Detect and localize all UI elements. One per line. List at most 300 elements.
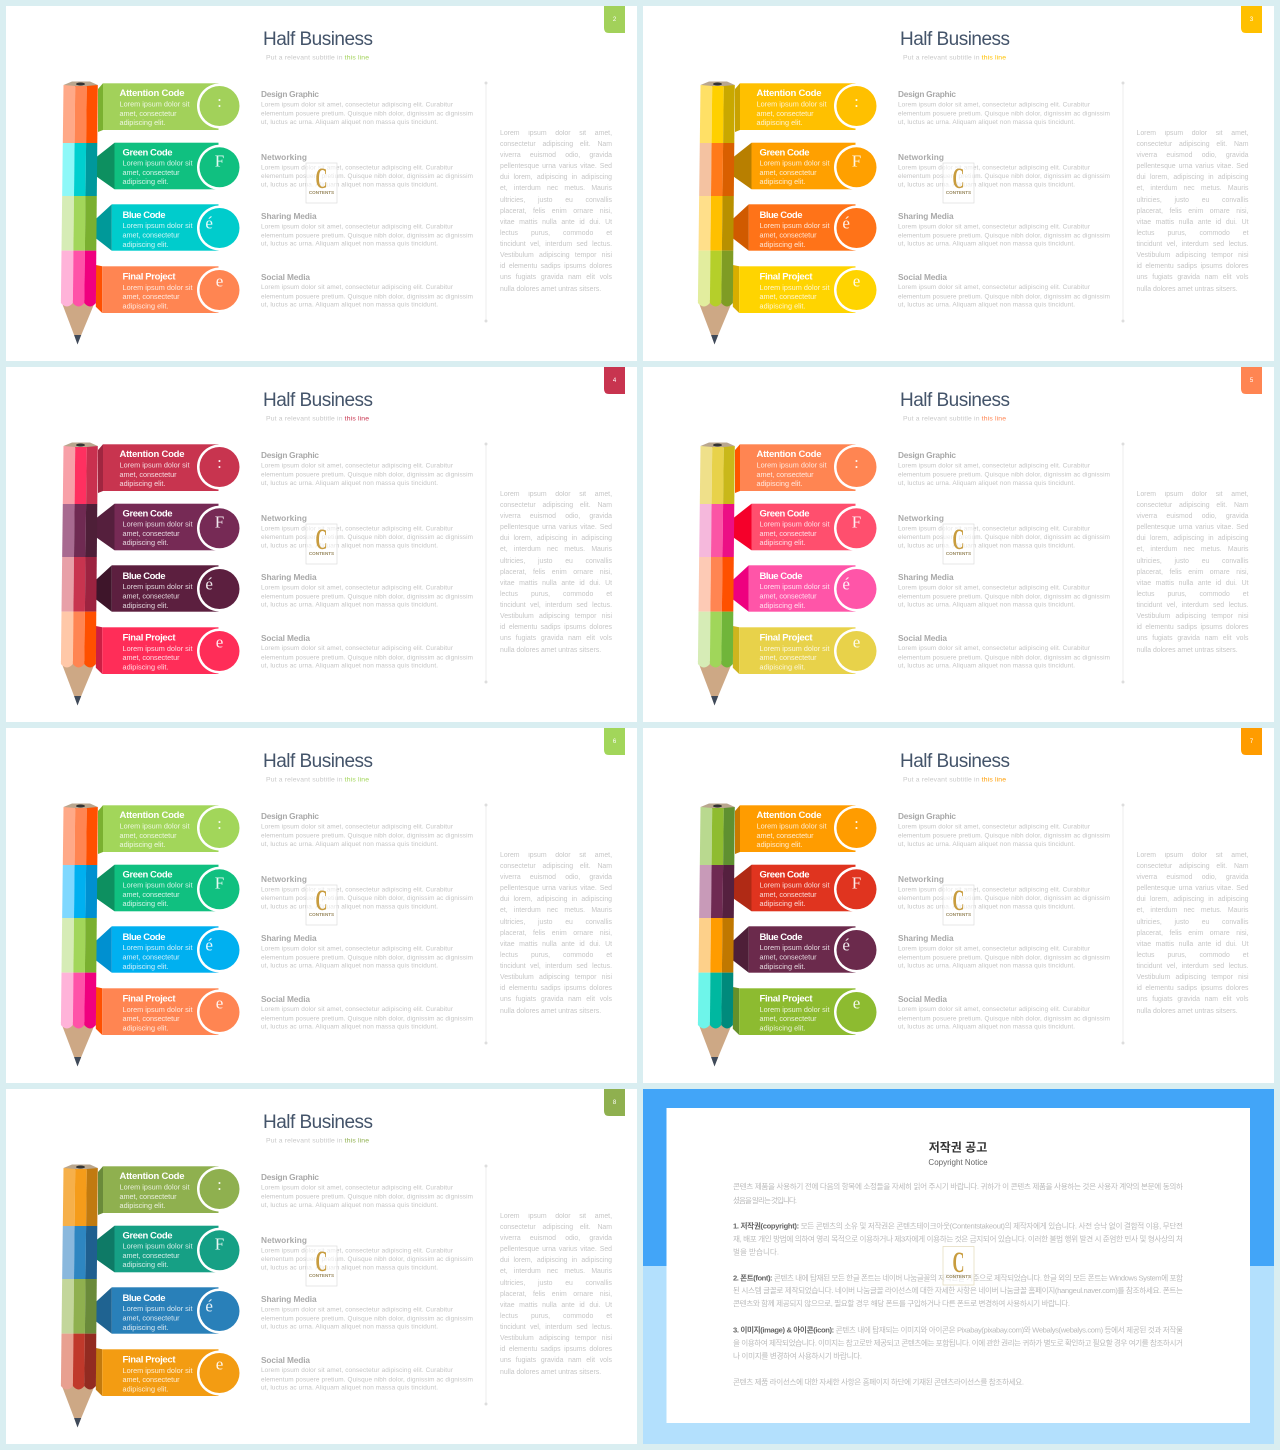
section: social media — [898, 272, 1110, 308]
banner: attention code: Lorem ipsum dolor sit — [120, 822, 190, 830]
watermark — [942, 523, 974, 564]
notice card — [666, 1108, 1250, 1423]
text column: dui lorem, adipiscing in adipiscing — [500, 174, 612, 181]
text column: ultricies, justo eu convallis — [1136, 197, 1248, 204]
text column: et, interdum nec metus. Mauris — [500, 907, 612, 914]
banner: final project: adipiscing elit. — [122, 662, 168, 672]
text column: id elementu sadips ipsums dolores — [500, 263, 612, 270]
section: social media — [261, 272, 473, 308]
text column: Lorem ipsum dolor sit amet, — [500, 491, 612, 498]
notice subheading: Copyright Notice — [928, 1158, 988, 1167]
section: social media: ut, luctus ac urna. Aliquam aliquet non massa quis tincidunt. — [261, 302, 438, 308]
banner: blue code: amet, consectetur — [122, 952, 180, 962]
banner: attention code: amet, consectetur — [120, 109, 177, 118]
text column: nulla dolores amet untras sitsers. — [500, 647, 601, 654]
text column: vitae mattis nulla ante id dui. Ut — [1136, 941, 1248, 948]
banner: blue code: amet, consectetur — [759, 952, 817, 962]
section: networking: ut, luctus ac urna. Aliquam aliquet non massa quis tincidunt. — [261, 1264, 438, 1272]
section: networking: Lorem ipsum dolor sit amet, consectetur adipiscing elit. Curabitur — [898, 164, 1090, 172]
banner: final project: e — [216, 994, 223, 1013]
text column: Lorem ipsum dolor sit amet, — [1136, 491, 1248, 498]
section: social media: Lorem ipsum dolor sit amet, consectetur adipiscing elit. Curabitur — [898, 1006, 1090, 1013]
banner: blue code: Blue Code — [122, 571, 166, 582]
banner: attention code: adipiscing elit. — [120, 840, 166, 849]
page tag — [604, 1089, 625, 1116]
section: social media: elementum posuere pretium. Quisque nibh dolor, dignissim ac dignissim — [898, 294, 1110, 300]
banner: attention code: adipiscing elit. — [756, 840, 802, 849]
section: networking: Networking — [261, 874, 307, 884]
section: social media: Social Media — [898, 994, 947, 1004]
banner: blue code: Blue Code — [759, 210, 802, 221]
watermark: CONTENTS — [309, 912, 334, 917]
banner: attention code: : — [854, 453, 858, 472]
text column: dui lorem, adipiscing in adipiscing — [500, 896, 612, 903]
page tag — [1240, 367, 1262, 394]
banner: blue code: amet, consectetur — [759, 230, 817, 240]
text column: Vestibulum adipiscing tempor nisi — [1136, 974, 1248, 981]
text column — [500, 852, 612, 1015]
icon: pencil — [697, 82, 734, 344]
banner: green code: amet, consectetur — [122, 168, 180, 177]
watermark — [306, 523, 337, 564]
section: sharing media: Lorem ipsum dolor sit amet, consectetur adipiscing elit. Curabitur — [898, 224, 1090, 230]
section: social media: Lorem ipsum dolor sit amet, consectetur adipiscing elit. Curabitur — [898, 284, 1090, 291]
section: social media: elementum posuere pretium. Quisque nibh dolor, dignissim ac dignissim — [261, 294, 473, 300]
banner: blue code: é — [842, 213, 849, 232]
text column: nulla dolores amet untras sitsers. — [1136, 647, 1238, 654]
watermark — [306, 1245, 337, 1286]
text column: et, interdum nec metus. Mauris — [1136, 907, 1248, 914]
banner: attention code: Attention Code — [120, 449, 184, 460]
section: networking: elementum posuere pretium. Quisque nibh dolor, dignissim ac dignissim — [261, 534, 473, 541]
banner: green code — [733, 143, 878, 190]
text column: consectetur adipiscing elit. Nam — [500, 502, 612, 509]
text column: vitae mattis nulla ante id dui. Ut — [500, 1302, 612, 1309]
banner: blue code: amet, consectetur — [122, 592, 180, 600]
section: design graphic: ut, luctus ac urna. Aliquam aliquet non massa quis tincidunt. — [261, 1202, 438, 1209]
text column: id elementu sadips ipsums dolores — [1136, 985, 1248, 992]
section: sharing media: elementum posuere pretium. Quisque nibh dolor, dignissim ac dignissim — [261, 1316, 473, 1322]
banner: final project: adipiscing elit. — [122, 302, 168, 310]
banner: attention code: : — [217, 814, 222, 833]
watermark: C — [316, 884, 327, 917]
banner: final project: adipiscing elit. — [759, 662, 805, 672]
banner: green code: amet, consectetur — [759, 168, 817, 177]
watermark: C — [316, 523, 327, 556]
section: networking: Lorem ipsum dolor sit amet, consectetur adipiscing elit. Curabitur — [898, 526, 1090, 532]
text column: Vestibulum adipiscing tempor nisi — [500, 252, 612, 259]
title: Half Business — [900, 751, 1010, 772]
title: Half Business — [900, 29, 1010, 50]
text column: et, interdum nec metus. Mauris — [500, 546, 612, 553]
banner: green code: Green Code — [759, 870, 809, 880]
banner: blue code: Lorem ipsum dolor sit — [122, 221, 192, 230]
banner: blue code: amet, consectetur — [122, 230, 180, 240]
section: social media: ut, luctus ac urna. Aliquam aliquet non massa quis tincidunt. — [898, 1024, 1075, 1030]
watermark: C — [952, 162, 964, 195]
text column: tincidunt vel, interdum sed lectus. — [500, 1324, 612, 1331]
banner: green code: adipiscing elit. — [759, 177, 805, 186]
banner: attention code: Lorem ipsum dolor sit — [756, 822, 826, 830]
text column: pellentesque urna varius vitae. Sed — [500, 1246, 612, 1253]
text column: id elementu sadips ipsums dolores — [500, 1346, 612, 1353]
text column: nulla dolores amet untras sitsers. — [1136, 286, 1238, 293]
section: networking: Lorem ipsum dolor sit amet, consectetur adipiscing elit. Curabitur — [261, 164, 454, 172]
text column: ultricies, justo eu convallis — [500, 197, 612, 204]
text column: et, interdum nec metus. Mauris — [500, 185, 612, 192]
banner: green code: Lorem ipsum dolor sit — [759, 520, 829, 528]
watermark — [306, 884, 337, 925]
section: sharing media: Sharing Media — [898, 572, 953, 582]
section: networking: elementum posuere pretium. Quisque nibh dolor, dignissim ac dignissim — [261, 1256, 473, 1263]
banner: attention code: Lorem ipsum dolor sit — [120, 100, 190, 108]
page tag: 6 — [613, 739, 617, 745]
banner: green code: F — [851, 513, 861, 532]
banner: final project: amet, consectetur — [759, 292, 817, 301]
text column: placerat, felis enim ornare nisi, — [500, 930, 612, 937]
text column: tincidunt vel, interdum sed lectus. — [500, 241, 612, 248]
text column: lectus purus, commodo et — [500, 230, 612, 237]
section: design graphic — [898, 89, 1110, 126]
section: sharing media: ut, luctus ac urna. Aliquam aliquet non massa quis tincidunt. — [898, 602, 1075, 608]
clause 3: image and icon — [733, 1325, 1183, 1361]
text column: lectus purus, commodo et — [1136, 591, 1248, 598]
section: social media: Social Media — [261, 994, 310, 1004]
banner: blue code: Blue Code — [122, 932, 166, 943]
banner: blue code: amet, consectetur — [759, 592, 817, 600]
text column: vitae mattis nulla ante id dui. Ut — [500, 941, 612, 948]
clause 2: font: 2. 폰트(font): 콘텐츠 내에 탑재된 모든 한글 폰트는 네이버 나눔글꼴의 저작권을 기준으로 제작되었습니다. 한글 외의 모든 폰트는 Windows System에 포함 — [733, 1273, 1183, 1283]
section: design graphic: elementum posuere pretium. Quisque nibh dolor, dignissim ac dignissim — [261, 472, 473, 478]
text column: placerat, felis enim ornare nisi, — [1136, 208, 1248, 215]
section: sharing media: ut, luctus ac urna. Aliquam aliquet non massa quis tincidunt. — [261, 962, 438, 970]
banner: green code — [733, 865, 878, 912]
text column: id elementu sadips ipsums dolores — [1136, 263, 1248, 270]
section: social media: ut, luctus ac urna. Aliquam aliquet non massa quis tincidunt. — [898, 302, 1075, 308]
banner: green code: Green Code — [122, 508, 172, 520]
banner: blue code: é — [205, 1296, 213, 1315]
banner: attention code — [98, 805, 242, 854]
banner: green code: adipiscing elit. — [122, 177, 168, 186]
banner: blue code: Lorem ipsum dolor sit — [122, 1304, 192, 1313]
section: social media: Social Media — [261, 633, 310, 643]
section: networking: elementum posuere pretium. Quisque nibh dolor, dignissim ac dignissim — [261, 895, 473, 902]
banner: final project — [96, 265, 242, 313]
banner: green code: adipiscing elit. — [122, 1260, 168, 1269]
banner: attention code: adipiscing elit. — [120, 118, 166, 127]
text column: et, interdum nec metus. Mauris — [500, 1268, 612, 1275]
banner: green code: F — [215, 513, 224, 532]
panel: slide 6 — [6, 728, 637, 1083]
section: design graphic: Design Graphic — [261, 89, 319, 99]
banner: blue code — [732, 926, 878, 973]
banner: final project: amet, consectetur — [759, 653, 817, 662]
text column: vitae mattis nulla ante id dui. Ut — [1136, 580, 1248, 587]
banner: attention code: amet, consectetur — [120, 1192, 177, 1201]
text column: id elementu sadips ipsums dolores — [1136, 624, 1248, 631]
section: social media: Social Media — [261, 1355, 310, 1365]
text column: tincidunt vel, interdum sed lectus. — [1136, 963, 1248, 970]
section: design graphic: ut, luctus ac urna. Aliquam aliquet non massa quis tincidunt. — [261, 841, 438, 848]
banner: green code: amet, consectetur — [122, 529, 180, 538]
banner: final project: adipiscing elit. — [122, 1024, 168, 1032]
banner: final project — [96, 1348, 242, 1396]
text column: placerat, felis enim ornare nisi, — [500, 569, 612, 576]
text column: id elementu sadips ipsums dolores — [500, 624, 612, 631]
text column: dui lorem, adipiscing in adipiscing — [1136, 174, 1248, 181]
section: networking: elementum posuere pretium. Quisque nibh dolor, dignissim ac dignissim — [898, 173, 1110, 180]
banner: attention code: amet, consectetur — [120, 831, 177, 840]
panel: slide 5 — [643, 367, 1274, 722]
banner: green code: Green Code — [759, 508, 809, 520]
text column: dui lorem, adipiscing in adipiscing — [500, 535, 612, 542]
watermark: CONTENTS — [945, 551, 971, 556]
section: networking: Networking — [898, 874, 944, 884]
section: networking: elementum posuere pretium. Quisque nibh dolor, dignissim ac dignissim — [261, 173, 473, 180]
banner: attention code: : — [217, 92, 222, 111]
banner: green code: Green Code — [122, 1230, 172, 1242]
icon: pencil — [61, 1164, 98, 1428]
banner: green code: F — [215, 1235, 224, 1254]
section: social media: Lorem ipsum dolor sit amet, consectetur adipiscing elit. Curabitur — [261, 1367, 454, 1374]
text column — [1136, 130, 1248, 293]
text column — [500, 491, 612, 654]
section: social media: ut, luctus ac urna. Aliquam aliquet non massa quis tincidunt. — [261, 1384, 438, 1392]
section: social media: Lorem ipsum dolor sit amet, consectetur adipiscing elit. Curabitur — [261, 645, 454, 652]
section: networking: ut, luctus ac urna. Aliquam aliquet non massa quis tincidunt. — [898, 904, 1075, 910]
banner: attention code: adipiscing elit. — [756, 479, 802, 488]
banner: final project: Final Project — [759, 632, 813, 644]
page tag — [604, 728, 625, 755]
banner: final project: adipiscing elit. — [759, 1024, 805, 1032]
icon: pencil — [697, 442, 734, 706]
banner: final project — [96, 626, 242, 674]
subtitle: Put a relevant subtitle in this line — [902, 54, 1006, 62]
text column: Lorem ipsum dolor sit amet, — [500, 852, 612, 859]
text column: lectus purus, commodo et — [500, 952, 612, 959]
watermark — [942, 162, 974, 203]
title: Half Business — [263, 390, 373, 411]
text column: vitae mattis nulla ante id dui. Ut — [500, 580, 612, 587]
text column: vitae mattis nulla ante id dui. Ut — [1136, 219, 1248, 226]
text column: uns fugiats gravida nam elit vols — [1136, 274, 1248, 281]
subtitle: Put a relevant subtitle in this line — [266, 776, 369, 784]
section: design graphic: elementum posuere pretium. Quisque nibh dolor, dignissim ac dignissim — [261, 110, 473, 118]
section: design graphic: ut, luctus ac urna. Aliquam aliquet non massa quis tincidunt. — [261, 480, 438, 487]
watermark: C — [316, 162, 327, 195]
section: design graphic: Design Graphic — [898, 89, 956, 99]
clause 3: image and icon: 나 이미지를 변경하여 사용하시기 바랍니다. — [733, 1351, 862, 1361]
section: design graphic: Lorem ipsum dolor sit amet, consectetur adipiscing elit. Curabitur — [261, 462, 454, 470]
section: networking — [261, 874, 473, 910]
banner: blue code: adipiscing elit. — [122, 962, 168, 971]
banner: final project — [732, 987, 878, 1035]
text column: Lorem ipsum dolor sit amet, — [1136, 852, 1248, 859]
section: sharing media — [898, 933, 1110, 970]
banner: blue code — [96, 926, 242, 973]
watermark: C — [316, 1245, 327, 1278]
intro paragraph — [733, 1181, 1183, 1205]
banner: green code — [97, 504, 242, 551]
banner: blue code: adipiscing elit. — [122, 240, 168, 249]
banner: final project: e — [216, 272, 223, 291]
banner: green code: Lorem ipsum dolor sit — [759, 158, 829, 168]
banner: attention code: Attention Code — [120, 88, 184, 99]
banner: attention code: adipiscing elit. — [756, 118, 802, 127]
intro paragraph: 콘텐츠 제품을 사용하기 전에 다음의 항목에 소정들을 자세히 읽어 주시기 바랍니다. 귀하가 이 콘텐츠 제품을 사용하는 것은 사용자 계약의 본문에 동의하 — [733, 1181, 1183, 1191]
section: sharing media: Sharing Media — [261, 211, 317, 221]
text column: pellentesque urna varius vitae. Sed — [500, 524, 612, 531]
section: networking — [261, 513, 473, 550]
banner: blue code: é — [205, 935, 213, 954]
banner: attention code: Attention Code — [120, 810, 184, 821]
text column — [500, 1213, 612, 1376]
page tag: 5 — [1249, 378, 1253, 384]
section: sharing media: elementum posuere pretium. Quisque nibh dolor, dignissim ac dignissim — [898, 954, 1110, 962]
watermark — [942, 884, 974, 925]
text column: viverra euismod odio, gravida — [1136, 513, 1248, 520]
title: Half Business — [263, 1112, 373, 1133]
text column: tincidunt vel, interdum sed lectus. — [500, 963, 612, 970]
section: networking — [898, 513, 1110, 550]
banner: green code: F — [851, 152, 861, 171]
text column: uns fugiats gravida nam elit vols — [500, 996, 612, 1003]
page tag — [604, 367, 625, 394]
section: design graphic: elementum posuere pretium. Quisque nibh dolor, dignissim ac dignissim — [898, 110, 1110, 118]
banner: green code: amet, consectetur — [759, 890, 817, 899]
banner: final project: Lorem ipsum dolor sit — [759, 283, 829, 292]
text column: dui lorem, adipiscing in adipiscing — [500, 1257, 612, 1264]
section: design graphic: Lorem ipsum dolor sit amet, consectetur adipiscing elit. Curabitur — [898, 102, 1090, 108]
banner: attention code: adipiscing elit. — [120, 1201, 166, 1210]
section: sharing media: Lorem ipsum dolor sit amet, consectetur adipiscing elit. Curabitur — [898, 584, 1090, 592]
section: networking — [261, 1235, 473, 1272]
text column: tincidunt vel, interdum sed lectus. — [500, 602, 612, 609]
section: sharing media: Lorem ipsum dolor sit amet, consectetur adipiscing elit. Curabitur — [261, 1306, 454, 1314]
watermark: CONTENTS — [309, 1273, 334, 1278]
banner: blue code: Lorem ipsum dolor sit — [759, 221, 829, 230]
banner: final project: e — [852, 633, 860, 652]
section: social media: Lorem ipsum dolor sit amet, consectetur adipiscing elit. Curabitur — [261, 284, 454, 291]
section: networking: Lorem ipsum dolor sit amet, consectetur adipiscing elit. Curabitur — [261, 526, 454, 532]
banner: blue code: Blue Code — [122, 210, 166, 221]
section: design graphic: ut, luctus ac urna. Aliquam aliquet non massa quis tincidunt. — [261, 119, 438, 126]
text column: et, interdum nec metus. Mauris — [1136, 546, 1248, 553]
section: sharing media — [261, 572, 473, 608]
clause 3: image and icon: 을 이용하여 제작되었습니다. 이미지는 참고로만 제공되고 콘텐츠에는 포함됩니다. 이에 관한 권리는 귀하가 별도로 확인하고 필요할 경우 여기를 참조하시거 — [733, 1338, 1183, 1348]
icon: pencil — [697, 804, 734, 1066]
text column: dui lorem, adipiscing in adipiscing — [1136, 896, 1248, 903]
text column: consectetur adipiscing elit. Nam — [500, 1224, 612, 1231]
banner: blue code: adipiscing elit. — [759, 962, 805, 971]
section: design graphic: ut, luctus ac urna. Aliquam aliquet non massa quis tincidunt. — [898, 841, 1075, 848]
text column: viverra euismod odio, gravida — [500, 874, 612, 881]
text column: ultricies, justo eu convallis — [1136, 558, 1248, 565]
banner: green code: Green Code — [122, 870, 172, 880]
section: design graphic: elementum posuere pretium. Quisque nibh dolor, dignissim ac dignissim — [898, 832, 1110, 840]
banner: attention code — [734, 83, 878, 132]
section: networking: ut, luctus ac urna. Aliquam aliquet non massa quis tincidunt. — [261, 182, 438, 188]
banner: green code: amet, consectetur — [122, 1251, 180, 1260]
banner: blue code: adipiscing elit. — [122, 1323, 168, 1332]
banner: final project: amet, consectetur — [122, 292, 180, 301]
banner: final project: amet, consectetur — [759, 1014, 817, 1023]
background: light blue band — [643, 1266, 1274, 1444]
section: sharing media: Sharing Media — [898, 933, 953, 943]
banner: green code: Lorem ipsum dolor sit — [122, 520, 192, 528]
section: sharing media: Lorem ipsum dolor sit amet, consectetur adipiscing elit. Curabitur — [261, 584, 454, 592]
text column: ultricies, justo eu convallis — [500, 919, 612, 926]
title: Half Business — [900, 390, 1010, 411]
banner: final project: Final Project — [759, 272, 813, 282]
text column: dui lorem, adipiscing in adipiscing — [1136, 535, 1248, 542]
section: sharing media: ut, luctus ac urna. Aliquam aliquet non massa quis tincidunt. — [898, 962, 1075, 970]
section: design graphic: Lorem ipsum dolor sit amet, consectetur adipiscing elit. Curabitur — [261, 1184, 454, 1192]
banner: green code: Lorem ipsum dolor sit — [759, 880, 829, 890]
section: sharing media — [898, 211, 1110, 248]
page tag — [604, 6, 625, 33]
text column: lectus purus, commodo et — [500, 1313, 612, 1320]
section: design graphic — [261, 450, 473, 487]
page tag — [1240, 6, 1262, 33]
section: design graphic: elementum posuere pretium. Quisque nibh dolor, dignissim ac dignissim — [261, 832, 473, 840]
section: design graphic: Lorem ipsum dolor sit amet, consectetur adipiscing elit. Curabitur — [898, 824, 1090, 830]
text column: pellentesque urna varius vitae. Sed — [1136, 524, 1248, 531]
section: networking: ut, luctus ac urna. Aliquam aliquet non massa quis tincidunt. — [261, 542, 438, 550]
section: design graphic: Lorem ipsum dolor sit amet, consectetur adipiscing elit. Curabitur — [261, 824, 454, 830]
banner: green code: Lorem ipsum dolor sit — [122, 158, 192, 168]
section: networking — [898, 152, 1110, 188]
section: design graphic: elementum posuere pretium. Quisque nibh dolor, dignissim ac dignissim — [898, 472, 1110, 478]
banner: attention code: Attention Code — [120, 1171, 184, 1182]
text column: placerat, felis enim ornare nisi, — [1136, 569, 1248, 576]
banner: blue code: é — [842, 935, 849, 954]
text column: nulla dolores amet untras sitsers. — [500, 1369, 601, 1376]
banner: final project — [96, 987, 242, 1035]
section: networking: ut, luctus ac urna. Aliquam aliquet non massa quis tincidunt. — [898, 182, 1075, 188]
section: sharing media: elementum posuere pretium. Quisque nibh dolor, dignissim ac dignissim — [898, 232, 1110, 240]
section: design graphic: Design Graphic — [898, 811, 956, 821]
section: networking: Lorem ipsum dolor sit amet, consectetur adipiscing elit. Curabitur — [898, 886, 1090, 894]
section: social media: Lorem ipsum dolor sit amet, consectetur adipiscing elit. Curabitur — [261, 1006, 454, 1013]
text column: Vestibulum adipiscing tempor nisi — [1136, 613, 1248, 620]
text column: ultricies, justo eu convallis — [500, 558, 612, 565]
banner: green code: amet, consectetur — [759, 529, 817, 538]
banner: final project — [732, 265, 878, 313]
section: networking — [261, 152, 473, 188]
section: sharing media — [261, 933, 473, 970]
section: design graphic: Design Graphic — [261, 811, 319, 821]
banner: blue code — [96, 565, 242, 612]
watermark — [306, 162, 337, 203]
section: networking: Lorem ipsum dolor sit amet, consectetur adipiscing elit. Curabitur — [261, 886, 454, 894]
banner: attention code: Lorem ipsum dolor sit — [120, 1182, 190, 1192]
section: social media — [898, 994, 1110, 1030]
banner: blue code — [96, 204, 242, 251]
banner: attention code: : — [854, 814, 858, 833]
section: design graphic: Design Graphic — [261, 450, 319, 460]
section: social media: ut, luctus ac urna. Aliquam aliquet non massa quis tincidunt. — [261, 1024, 438, 1030]
section: networking — [898, 874, 1110, 910]
banner: final project: e — [216, 633, 223, 652]
section: sharing media: elementum posuere pretium. Quisque nibh dolor, dignissim ac dignissim — [898, 594, 1110, 600]
page tag: 4 — [613, 378, 617, 384]
subtitle: Put a relevant subtitle in this line — [266, 416, 369, 422]
banner: blue code: Lorem ipsum dolor sit — [122, 943, 192, 952]
watermark: CONTENTS — [309, 551, 334, 556]
section: social media: ut, luctus ac urna. Aliquam aliquet non massa quis tincidunt. — [261, 662, 438, 670]
section: sharing media: ut, luctus ac urna. Aliquam aliquet non massa quis tincidunt. — [261, 240, 438, 248]
